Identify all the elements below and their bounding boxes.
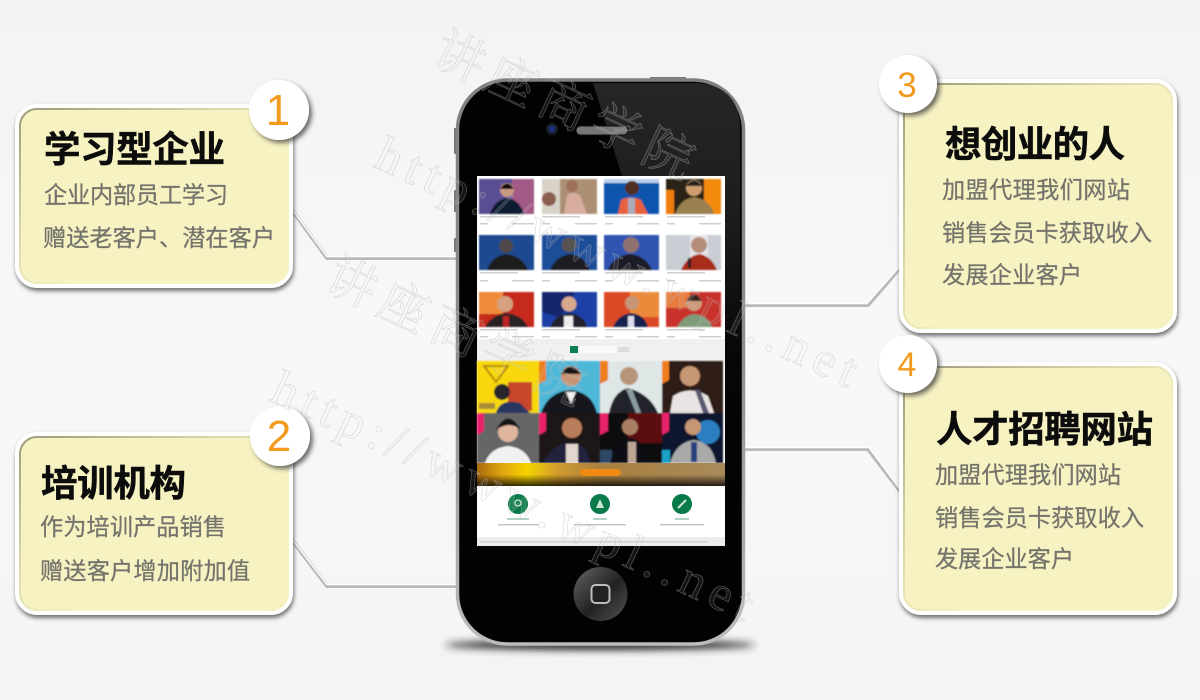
- text: 赠送客户增加附加值: 赠送客户增加附加值: [40, 558, 250, 584]
- badge: 2: [250, 406, 310, 466]
- poster row 2: [477, 413, 723, 463]
- pagination strip: [477, 339, 725, 361]
- watermark: [263, 21, 867, 632]
- connector: card 1 to phone: [292, 209, 458, 258]
- text: 作为培训产品销售: 作为培训产品销售: [40, 514, 226, 540]
- heading: 培训机构: 培训机构: [41, 463, 186, 504]
- watermark: 讲座商学院: [425, 21, 703, 190]
- video thumbnails: [479, 179, 721, 327]
- gold banner: [477, 463, 725, 486]
- watermark: 讲座商学院: [317, 247, 595, 416]
- badge: 4: [879, 335, 937, 393]
- icon: user: [574, 494, 626, 526]
- watermark: http://www.wpl..net: [263, 359, 763, 632]
- connector: card 3 to phone: [744, 266, 900, 305]
- heading: 想创业的人: 想创业的人: [945, 124, 1125, 165]
- text: 销售会员卡获取收入: 销售会员卡获取收入: [935, 505, 1144, 531]
- icon: pencil: [660, 494, 704, 526]
- text: 销售会员卡获取收入: 销售会员卡获取收入: [942, 220, 1152, 246]
- text: 发展企业客户: 发展企业客户: [935, 546, 1074, 572]
- connector: card 2 to phone: [292, 539, 458, 586]
- heading: 人才招聘网站: 人才招聘网站: [936, 409, 1153, 450]
- badge: 1: 1: [266, 86, 290, 135]
- panel: 培训机构: [17, 406, 310, 613]
- badge: 4: 4: [898, 346, 916, 384]
- camera: [546, 123, 558, 135]
- screen: [477, 176, 725, 546]
- thumb row 2: [479, 235, 721, 270]
- poster row 1: [477, 361, 723, 413]
- phone: [454, 77, 744, 644]
- panel: 学习型企业: [17, 80, 309, 286]
- badge: 3: [879, 55, 937, 113]
- badge: 3: 3: [897, 66, 917, 105]
- poster ribbons pink: [477, 413, 669, 435]
- side buttons: [454, 77, 686, 252]
- speaker: [576, 126, 628, 135]
- text: 发展企业客户: 发展企业客户: [942, 262, 1082, 288]
- icon: search: [498, 494, 539, 526]
- phone body: [458, 80, 744, 644]
- home button: [574, 567, 628, 621]
- poster ribbons orange: [539, 361, 669, 384]
- poster grid: [477, 361, 723, 463]
- panel: 想创业的人: [879, 55, 1175, 331]
- panel: 人才招聘网站: [879, 335, 1175, 613]
- badge: 1: [249, 80, 309, 140]
- text: 赠送老客户、潜在客户: 赠送老客户、潜在客户: [43, 225, 275, 251]
- watermark: http://www.wpl..net: [367, 125, 867, 398]
- screen glare: [593, 83, 740, 546]
- thumbnail captions: [480, 216, 721, 338]
- text: 加盟代理我们网站: 加盟代理我们网站: [942, 177, 1130, 203]
- screen footer strip: [477, 537, 725, 546]
- thumb row 1: [479, 179, 721, 214]
- text: 加盟代理我们网站: 加盟代理我们网站: [935, 462, 1121, 488]
- badge: 2: 2: [267, 412, 291, 461]
- text: 企业内部员工学习: 企业内部员工学习: [44, 182, 228, 208]
- phone shadow: [445, 640, 755, 650]
- heading: 学习型企业: 学习型企业: [44, 129, 225, 170]
- connector: card 4 to phone: [744, 448, 900, 491]
- feature icons: [498, 494, 704, 526]
- thumb row 3: [479, 292, 721, 327]
